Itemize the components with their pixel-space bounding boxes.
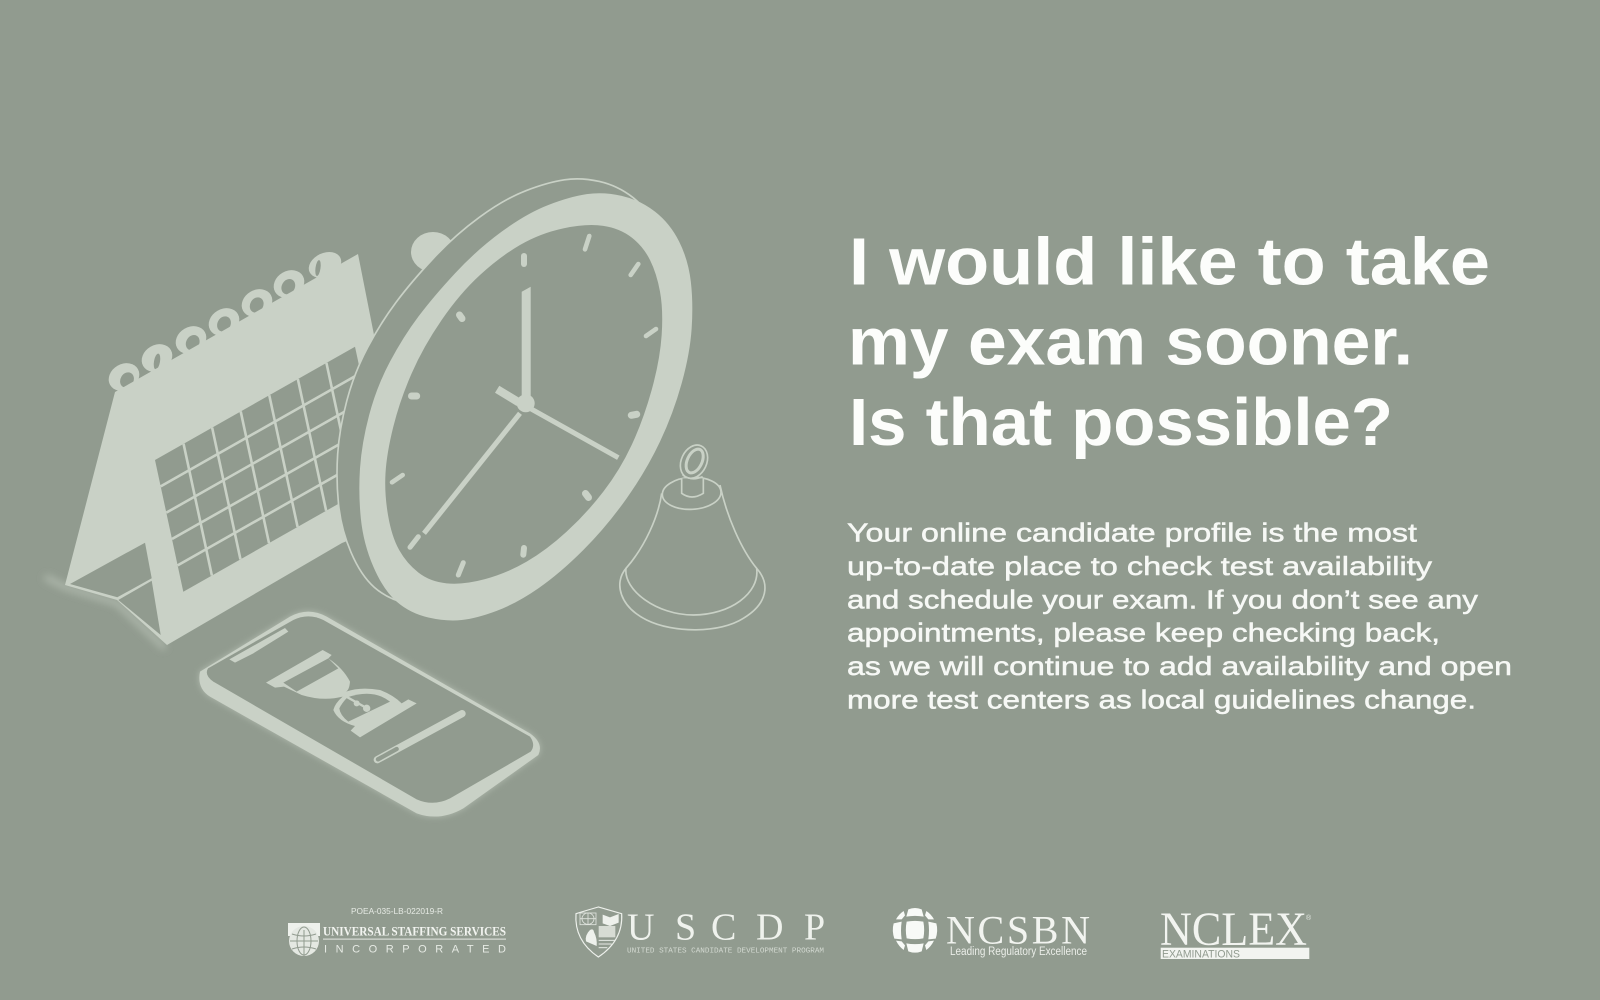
- body text: [847, 520, 1512, 714]
- heading: [848, 225, 1490, 460]
- logo: NCSBN: Leading Regulatory Excellence: [950, 946, 1087, 958]
- body text: more test centers as local guidelines change.: [847, 686, 1476, 714]
- logo: USCDP: [576, 906, 825, 957]
- body text: up-to-date place to check test availability: [847, 553, 1432, 581]
- logo: USCDP: S: [675, 906, 696, 948]
- shield: [576, 907, 622, 957]
- logo: NCLEX Examinations: NCLEX: [1160, 903, 1307, 956]
- logo: NCSBN: NCSBN: [946, 907, 1090, 952]
- NCSBN globe mark: [893, 908, 937, 953]
- desk bell: [620, 441, 765, 630]
- logo: USCDP: C: [711, 906, 736, 948]
- smartphone with hourglass: [199, 612, 540, 817]
- reference code: POEA-035-LB-022019-R: [351, 906, 443, 916]
- clock hour ticks: [392, 236, 656, 575]
- phone speaker notch: [229, 628, 288, 663]
- clock hands: [424, 287, 618, 533]
- body text: appointments, please keep checking back,: [847, 620, 1440, 648]
- logo: Universal Staffing Services: [288, 923, 506, 956]
- heading: Is that possible?: [849, 385, 1393, 460]
- heading: I would like to take: [849, 225, 1490, 300]
- logo: Universal Staffing Services: UNIVERSAL STAFFING SERVICES: [323, 924, 506, 939]
- logo: NCLEX Examinations: EXAMINATIONS: [1162, 948, 1240, 960]
- footer logos: [288, 903, 1312, 960]
- progress bar: [377, 714, 462, 760]
- logo: NCLEX Examinations: ®: [1306, 914, 1312, 922]
- logo: Universal Staffing Services: INCORPORATED: [324, 943, 506, 955]
- logo: USCDP: U: [627, 906, 654, 948]
- body text: Your online candidate profile is the most: [847, 520, 1417, 548]
- body text: as we will continue to add availability and open: [847, 653, 1512, 681]
- logo: USCDP: D: [756, 906, 783, 948]
- logo: USCDP: P: [804, 906, 825, 948]
- logo: USCDP: UNITED STATES CANDIDATE DEVELOPMENT PROGRAM: [627, 948, 824, 956]
- hourglass icon: [266, 650, 417, 737]
- illustration: calendar, clock, bell and phone: [45, 179, 765, 817]
- calendar: [45, 247, 400, 648]
- body text: and schedule your exam. If you don’t see any: [847, 586, 1478, 614]
- alarm clock: [337, 179, 692, 620]
- heading: my exam sooner.: [848, 304, 1413, 380]
- logo: NCSBN: [893, 907, 1090, 958]
